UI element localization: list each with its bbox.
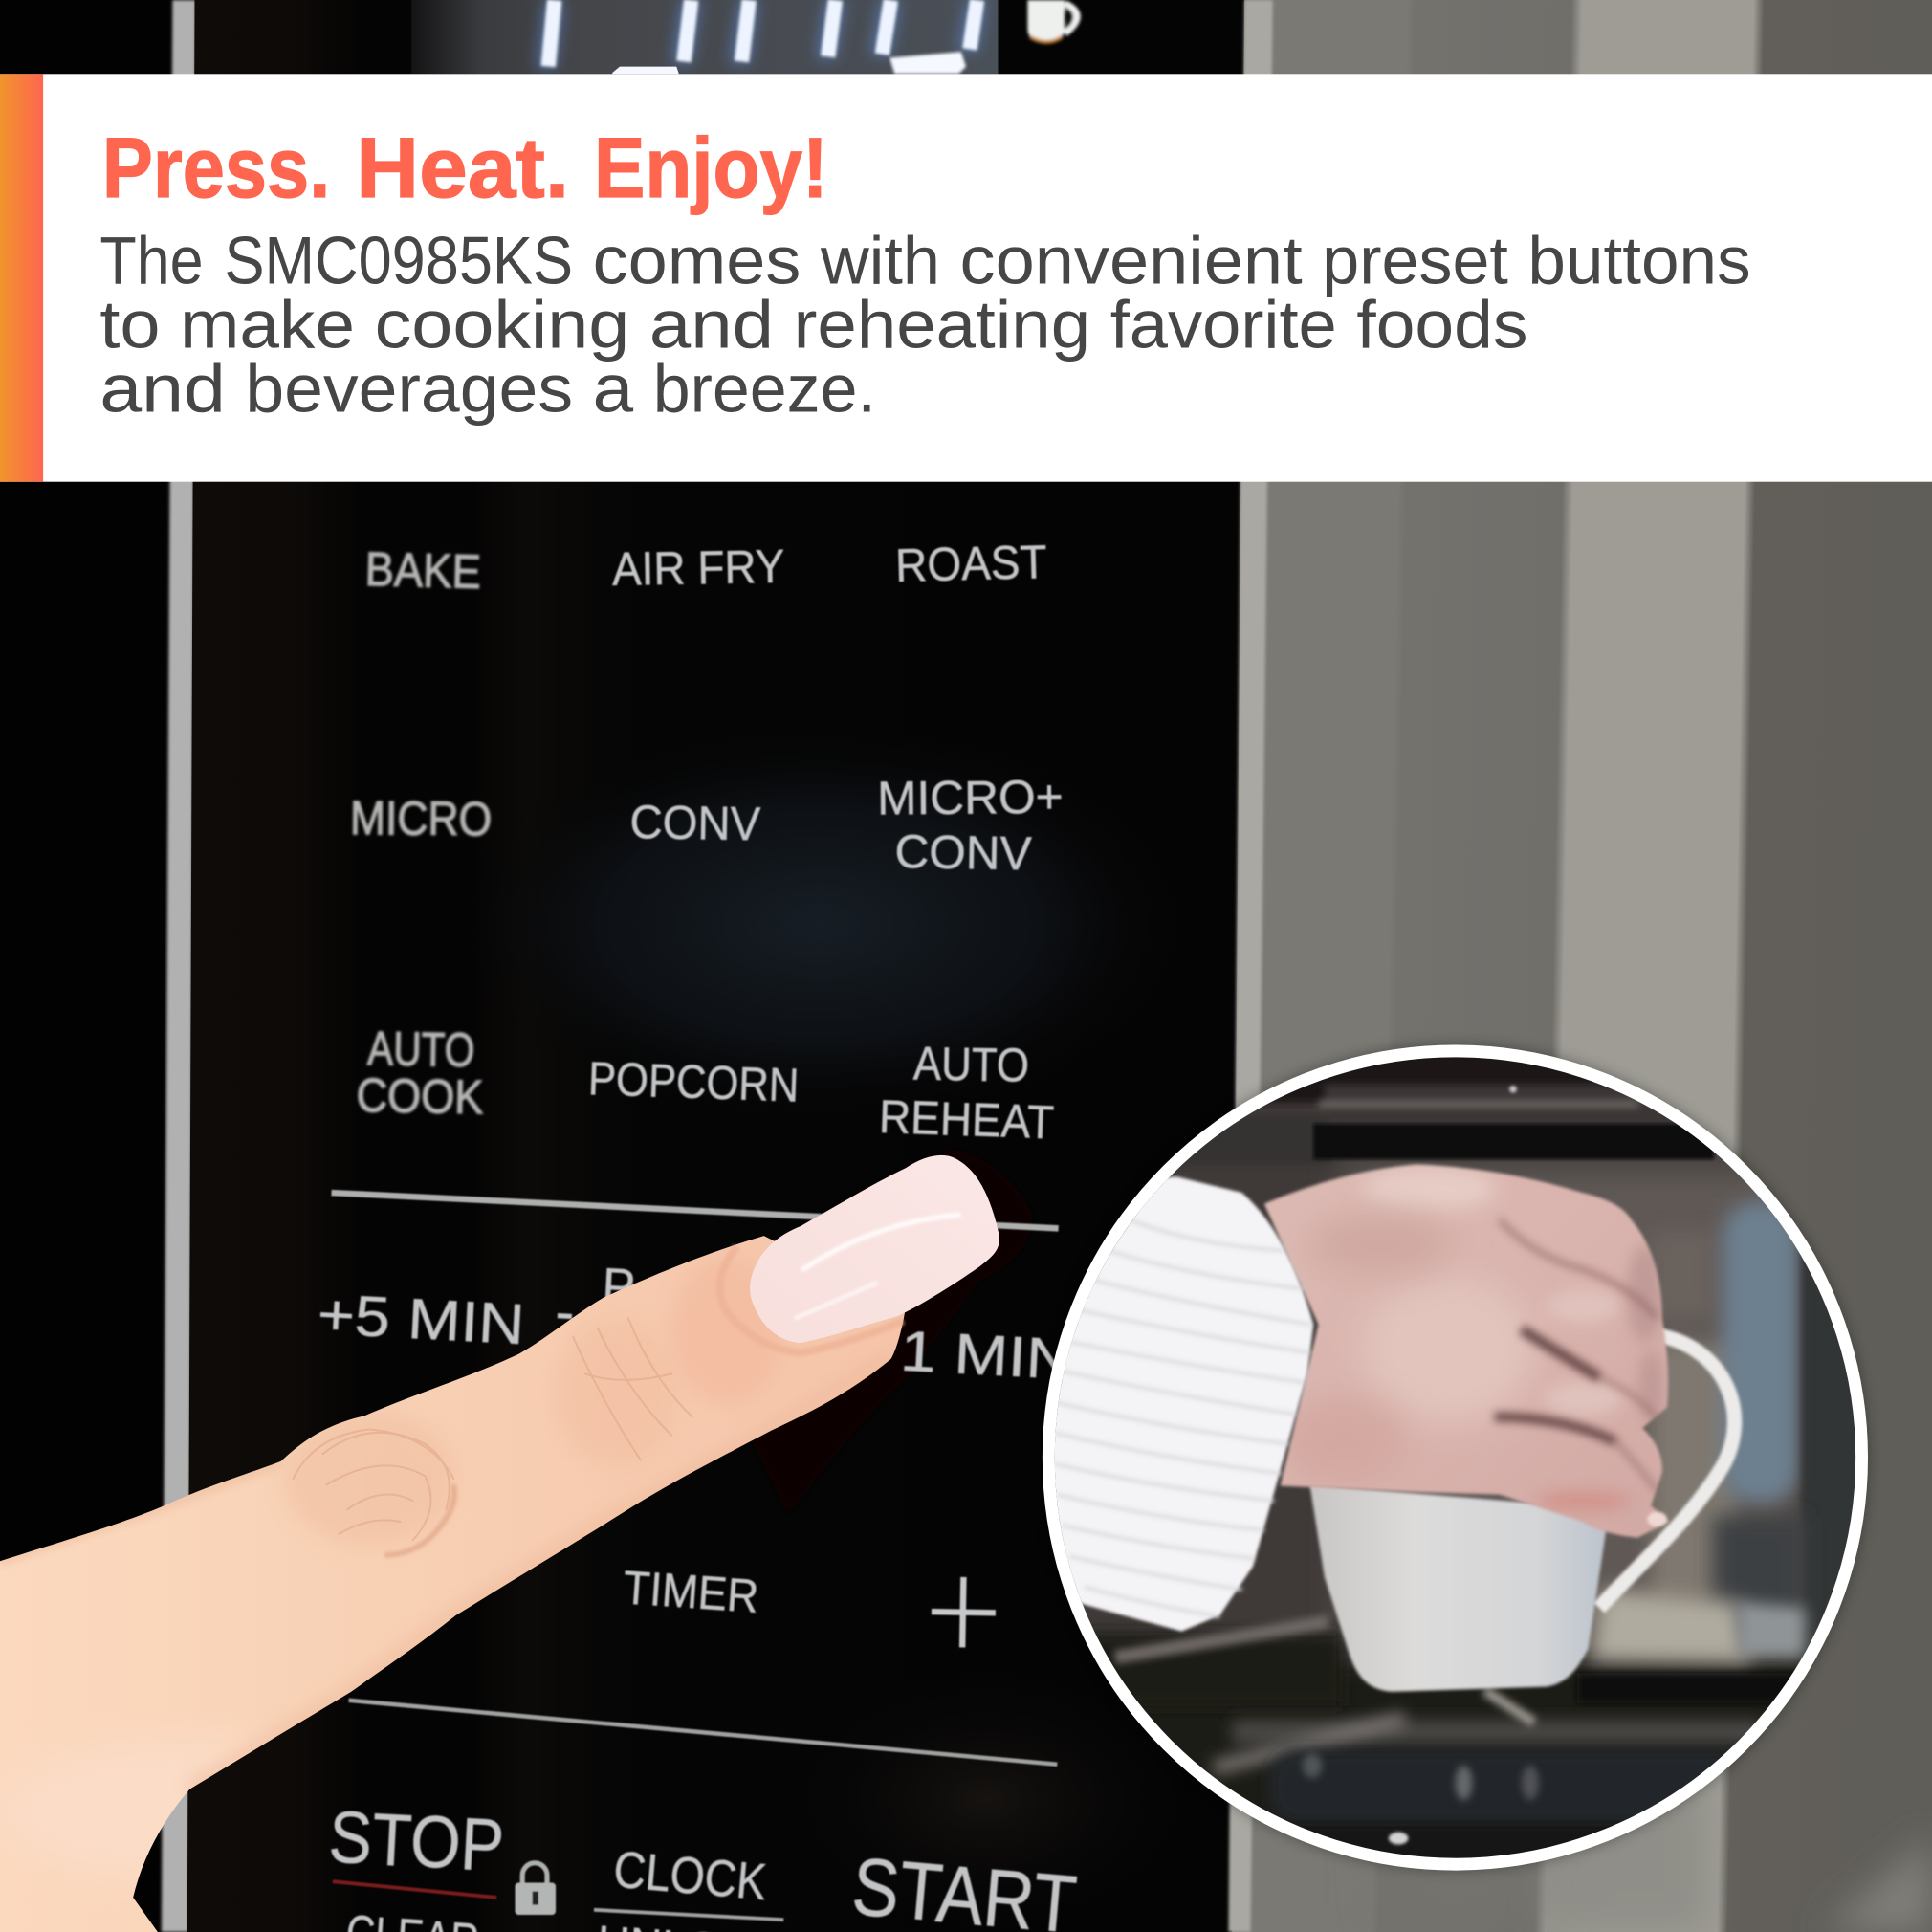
control panel button labels: STOP (327, 1796, 506, 1887)
finger (0, 1236, 906, 1932)
body text: breeze. (653, 351, 876, 427)
clock display, top strip (411, 0, 1077, 74)
control panel button labels: CONV (629, 797, 761, 850)
body text: beverages (245, 351, 573, 427)
control panel button labels: CLOCK (611, 1841, 769, 1911)
body text: reheating (794, 287, 1090, 362)
control panel button labels: AUTO (912, 1039, 1029, 1092)
body text: comes (593, 223, 801, 298)
control panel button labels: 1 MIN (899, 1319, 1074, 1392)
icon: cup indicator (1027, 0, 1077, 42)
body text: cooking (375, 287, 629, 362)
body text: a (593, 351, 634, 427)
control panel button labels (316, 537, 1080, 1932)
body text: to (99, 287, 160, 362)
body text: and (99, 351, 226, 427)
inset photo: hand holding mug (1047, 1042, 1876, 1873)
control panel button labels: AUTO (367, 1021, 475, 1077)
panel: header (0, 74, 1932, 482)
body text: convenient (960, 223, 1303, 298)
fingernail (750, 1155, 999, 1343)
control panel button labels: MICRO+ (877, 772, 1064, 825)
control panel button labels: TIMER (622, 1562, 760, 1623)
heading: Press. (102, 121, 330, 215)
knuckle wrinkles (294, 1318, 692, 1540)
cabinet panels (1232, 0, 1932, 1932)
body text: and (649, 287, 774, 362)
cuticle (719, 1247, 903, 1353)
control panel button labels: ROAST (894, 537, 1047, 592)
heading: Enjoy! (594, 121, 828, 215)
control panel button labels: MICRO (350, 791, 492, 845)
gradient accent bar (0, 74, 43, 482)
body text: The (99, 223, 204, 298)
heading: Heat. (356, 121, 569, 215)
fingertip shadow (739, 1149, 1033, 1516)
control panel button labels: REHEAT (878, 1091, 1055, 1149)
control panel button labels: AIR FRY (612, 541, 785, 596)
plus button (932, 1577, 996, 1647)
body text: make (180, 287, 355, 362)
heading (102, 121, 828, 215)
circle soft shadow (1043, 1046, 1867, 1869)
mug body (1309, 1484, 1609, 1692)
control panel button labels: P (601, 1258, 636, 1314)
body text (99, 223, 1751, 427)
control panel button labels: BAKE (364, 542, 482, 599)
mug handle (1599, 1334, 1735, 1608)
inset circle white border (1048, 1051, 1862, 1864)
body text: preset (1322, 223, 1508, 298)
cavity floor (1138, 1654, 1800, 1857)
hand (1264, 1164, 1670, 1538)
control panel button labels: CONV (894, 826, 1032, 880)
control panel surface (187, 0, 1244, 1932)
control panel button labels: - (554, 1279, 576, 1344)
silver door edge (1228, 0, 1273, 1932)
oven top frame (1263, 1058, 1613, 1107)
body text: favorite (1110, 287, 1337, 362)
body text: foods (1356, 287, 1527, 362)
blue reflection (1723, 1201, 1799, 1504)
microwave side trim (162, 0, 196, 1932)
control panel button labels: +5 MIN (316, 1282, 526, 1356)
body text: with (820, 223, 940, 298)
body text: SMC0985KS (224, 223, 573, 298)
panel divider lines (332, 1193, 1059, 1920)
body text: buttons (1527, 223, 1751, 298)
finger shading (0, 1257, 890, 1885)
sweater cuff (1047, 1176, 1313, 1632)
control panel button labels: POPCORN (587, 1053, 800, 1112)
icon: lock (515, 1863, 556, 1915)
control panel button labels: COOK (356, 1068, 484, 1124)
oven cavity (1055, 1103, 1735, 1800)
